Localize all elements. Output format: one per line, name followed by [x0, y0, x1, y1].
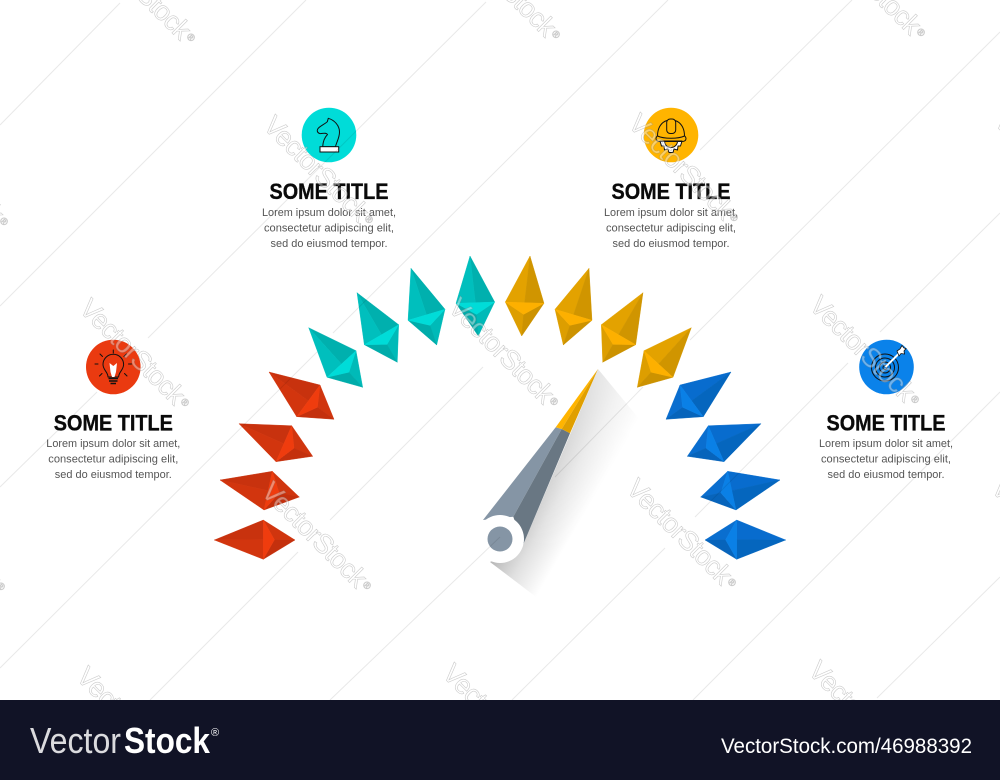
- text block: sed do eiusmod tempor.: [828, 469, 944, 481]
- gold segment 4: [637, 328, 691, 387]
- text block: [262, 207, 396, 250]
- text block: Lorem ipsum dolor sit amet,: [819, 438, 953, 450]
- blue segment 3: [701, 471, 780, 510]
- watermarks: ®: [178, 396, 191, 410]
- heading: SOME TITLE: [270, 179, 388, 204]
- teal segment 4: [456, 256, 495, 336]
- text block: consectetur adipiscing elit,: [48, 454, 178, 466]
- icon: hard hat with gear: [644, 108, 698, 162]
- teal segment 2: [357, 293, 399, 362]
- panel: left item: [46, 340, 180, 481]
- gauge: gold segments: [505, 256, 691, 387]
- watermarks: ®: [549, 28, 562, 42]
- text block: Lorem ipsum dolor sit amet,: [262, 207, 396, 219]
- watermarks: VectorStock: [258, 110, 375, 227]
- red segment 2: [220, 471, 299, 510]
- blue segment 4: [705, 520, 786, 559]
- text block: Lorem ipsum dolor sit amet,: [604, 207, 738, 219]
- gold segment 1: [505, 256, 544, 336]
- footer logo: Vector: [30, 720, 121, 761]
- heading: SOME TITLE: [54, 411, 173, 436]
- watermarks: ®: [908, 393, 921, 407]
- watermarks: ®: [547, 395, 560, 409]
- watermarks: VectorStock: [443, 292, 560, 409]
- panel: top right item: [604, 108, 738, 250]
- watermarks: ®: [362, 213, 375, 227]
- watermarks: VectorStock: [803, 655, 920, 772]
- watermarks: VectorStock: [437, 658, 554, 775]
- text block: Lorem ipsum dolor sit amet,: [46, 438, 180, 450]
- gauge needle: [483, 369, 624, 592]
- needle grey body: [483, 427, 570, 545]
- gold segment 2: [555, 268, 592, 345]
- gold segment 3: [601, 293, 643, 362]
- heading: SOME TITLE: [826, 411, 946, 436]
- footer logo: ®: [211, 727, 219, 739]
- watermarks: VectorStock: [74, 293, 191, 410]
- watermarks: VectorStock: [621, 473, 738, 590]
- red segment 3: [239, 424, 313, 462]
- teal segment 1: [309, 328, 363, 387]
- watermarks: VectorStock: [804, 290, 921, 407]
- text block: sed do eiusmod tempor.: [612, 238, 730, 250]
- watermarks: ®: [360, 579, 373, 593]
- text block: consectetur adipiscing elit,: [264, 222, 394, 234]
- footer bar: [0, 700, 1000, 780]
- blue segment 1: [666, 372, 731, 419]
- watermarks: ®: [907, 758, 920, 772]
- watermarks: ®: [727, 211, 740, 225]
- blue segment 2: [687, 424, 761, 462]
- red segment 1: [214, 520, 295, 559]
- text block: [46, 438, 180, 481]
- watermarks: VectorStock: [256, 476, 373, 593]
- panel: right item: [819, 340, 953, 481]
- text block: consectetur adipiscing elit,: [821, 454, 951, 466]
- text block: [819, 438, 953, 481]
- panel: top left item: [262, 108, 396, 250]
- watermarks: ®: [914, 26, 927, 40]
- footer image id: VectorStock.com/46988392: [721, 735, 972, 758]
- gauge: teal segments: [309, 256, 495, 387]
- watermarks: ®: [175, 764, 188, 778]
- icon: light bulb: [86, 340, 141, 394]
- footer logo: Stock: [124, 720, 211, 761]
- footer logo: [30, 720, 219, 761]
- text block: [604, 207, 738, 250]
- teal segment 3: [408, 268, 445, 345]
- watermarks: ®: [184, 31, 197, 45]
- needle gold tip: [556, 369, 598, 433]
- needle shadow: [490, 369, 624, 592]
- watermarks: ®: [725, 576, 738, 590]
- watermarks: ®: [541, 761, 554, 775]
- heading: SOME TITLE: [612, 179, 730, 204]
- text block: consectetur adipiscing elit,: [606, 222, 736, 234]
- watermarks: VectorStock: [623, 108, 740, 225]
- red segment 4: [269, 372, 334, 419]
- watermarks: VectorStock: [71, 661, 188, 778]
- text block: sed do eiusmod tempor.: [55, 469, 172, 481]
- gauge: blue segments: [666, 372, 786, 559]
- icon: target with dart: [859, 340, 914, 394]
- needle hub: [476, 515, 524, 563]
- text block: sed do eiusmod tempor.: [270, 238, 388, 250]
- icon: chess knight: [302, 108, 356, 162]
- gauge: red segments: [214, 372, 334, 559]
